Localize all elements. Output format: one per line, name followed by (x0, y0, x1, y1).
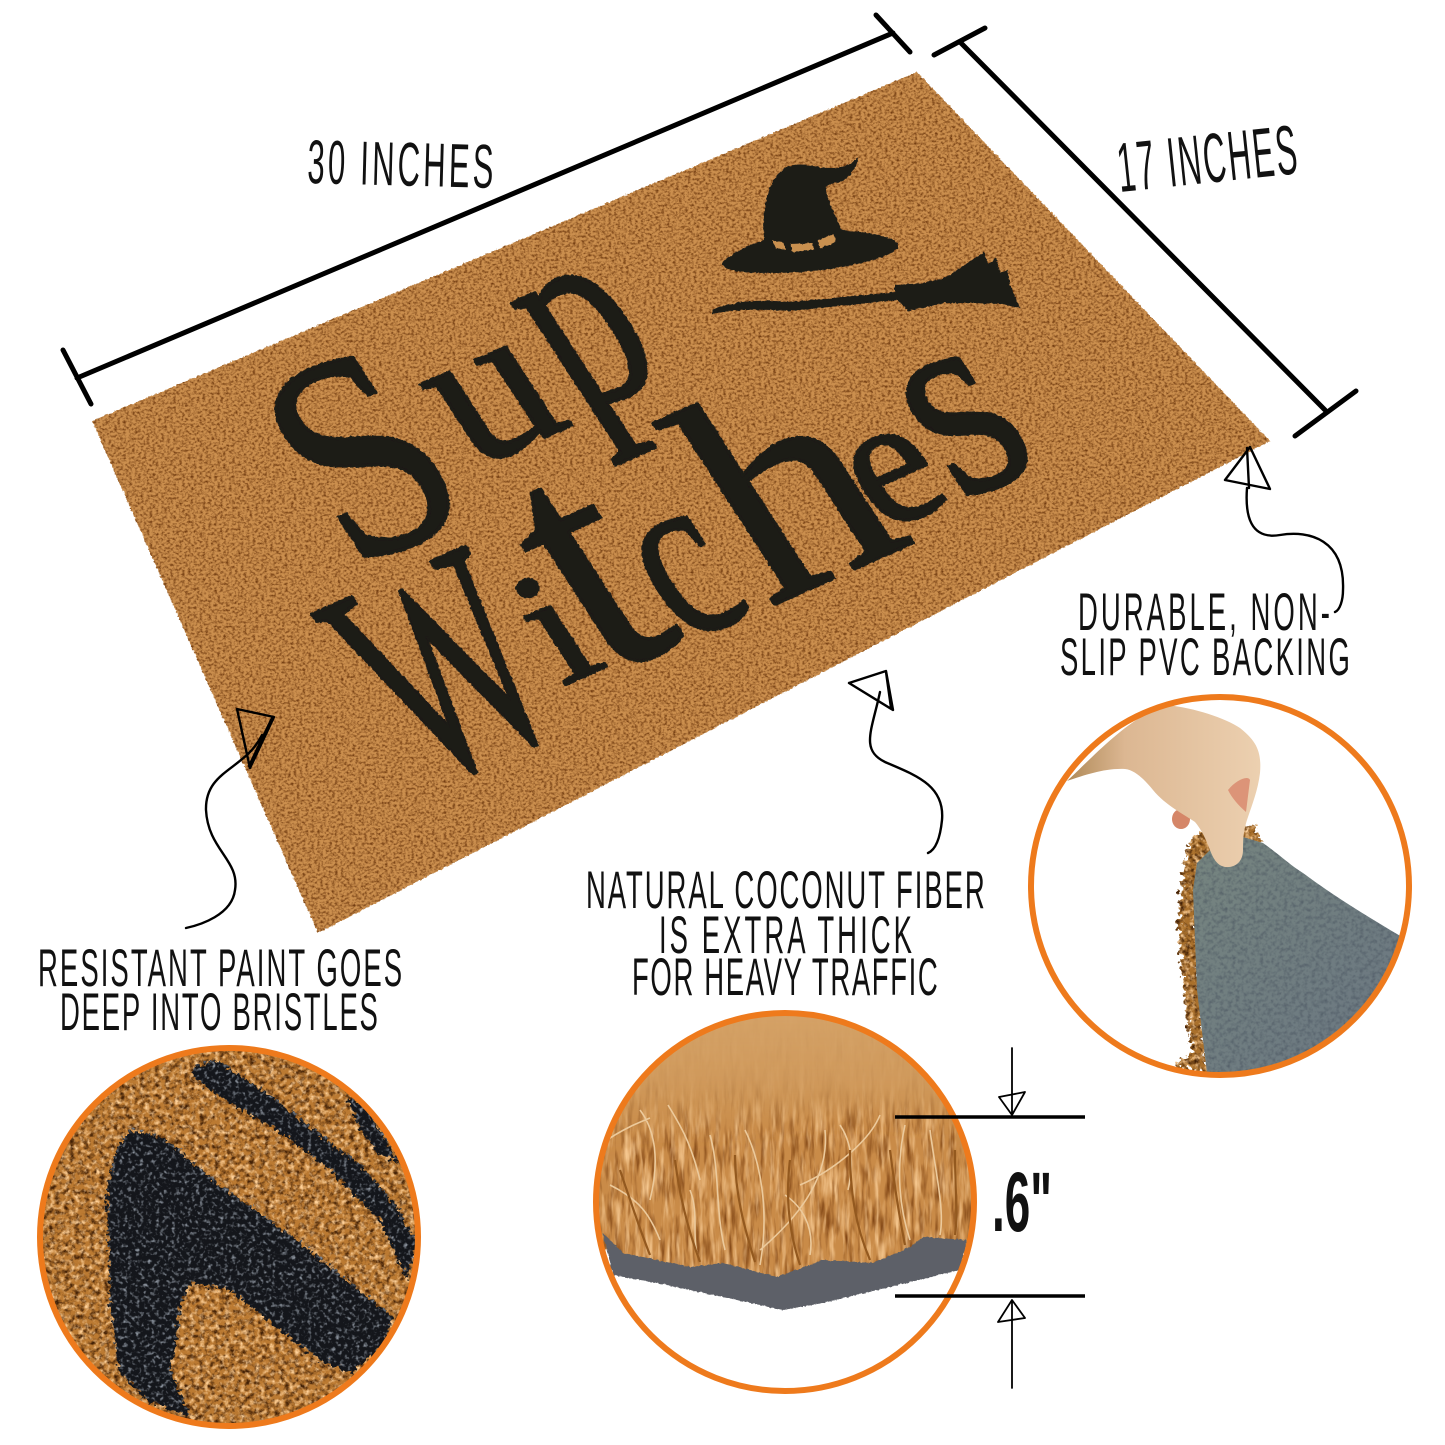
icon: broom (712, 252, 1020, 314)
mat lettering: Witches: c (561, 421, 787, 689)
finger crease (1228, 778, 1250, 812)
panel: coconut fiber close-up circle (593, 1010, 977, 1394)
mat lettering: Sup: p (440, 160, 706, 468)
label: 30 inches: 30 INCHES (307, 129, 494, 202)
icon: witch hat (722, 157, 898, 273)
dimension: pile thickness (895, 1048, 1085, 1388)
out of focus top bristles (615, 1016, 949, 1132)
mat lettering: Witches: e (791, 357, 980, 567)
mat lettering: Witches: t (432, 375, 731, 741)
arrow: paint callout (186, 709, 274, 928)
mat lettering: Witches: W (270, 482, 620, 849)
orange ring (40, 1048, 418, 1426)
mat lettering: Witches: s (817, 243, 1082, 555)
painted letter stroke (107, 1130, 393, 1417)
dimension line: length (63, 15, 910, 404)
arrow: backing callout (1225, 447, 1343, 612)
mat lettering: Sup: u (367, 261, 601, 509)
orange ring (596, 1013, 974, 1391)
gray backing flap (1193, 837, 1402, 1073)
label: 17 inches: 17 INCHES (1113, 110, 1301, 207)
mat lettering: Witches (270, 243, 1082, 849)
caption: natural coconut fiber: FOR HEAVY TRAFFIC (632, 947, 938, 1006)
caption: PVC backing (1060, 582, 1350, 686)
caption: PVC backing: DURABLE, NON- (1078, 582, 1330, 641)
mat lettering: Sup: S (204, 283, 519, 626)
mat lettering: Sup (204, 160, 706, 626)
painted stripe (193, 1060, 417, 1280)
top measure line (895, 1115, 1085, 1119)
gray backing (603, 1233, 967, 1310)
coir bristles background (43, 1051, 415, 1423)
orange ring (1031, 697, 1409, 1075)
arrow: coconut fiber callout (849, 671, 942, 853)
dimension: 30 inches (63, 15, 910, 404)
coir edge of lifted mat (1175, 825, 1262, 1072)
bottom measure line (895, 1294, 1085, 1298)
caption: PVC backing: SLIP PVC BACKING (1060, 627, 1350, 686)
caption: resistant paint: DEEP INTO BRISTLES (60, 982, 378, 1041)
loose light strands (600, 1105, 941, 1265)
arrow: down to top line (999, 1048, 1025, 1116)
caption: natural coconut fiber: NATURAL COCONUT FIBER (586, 860, 985, 919)
mat surface (92, 72, 1270, 933)
arrow: up to bottom line (998, 1300, 1025, 1388)
mat lettering: Witches: i (479, 536, 630, 717)
doormat (92, 72, 1270, 933)
mat lettering: Witches: h (617, 307, 955, 665)
fiber pile (599, 1030, 971, 1278)
dimension: 17 inches (934, 28, 1356, 436)
dimension line: width (934, 28, 1356, 436)
panel: backing close-up circle (1031, 697, 1409, 1075)
panel: paint close-up circle (30, 1040, 430, 1440)
dark fiber shadows (620, 1150, 956, 1265)
painted stripe upper right (347, 1097, 400, 1163)
caption: resistant paint: RESISTANT PAINT GOES (38, 938, 402, 997)
caption: natural coconut fiber (586, 860, 985, 1006)
hand (1067, 705, 1260, 867)
finger (1172, 809, 1190, 829)
label: .6 inch: .6" (992, 1155, 1052, 1249)
caption: natural coconut fiber: IS EXTRA THICK (659, 905, 912, 964)
caption: resistant paint (38, 938, 402, 1041)
